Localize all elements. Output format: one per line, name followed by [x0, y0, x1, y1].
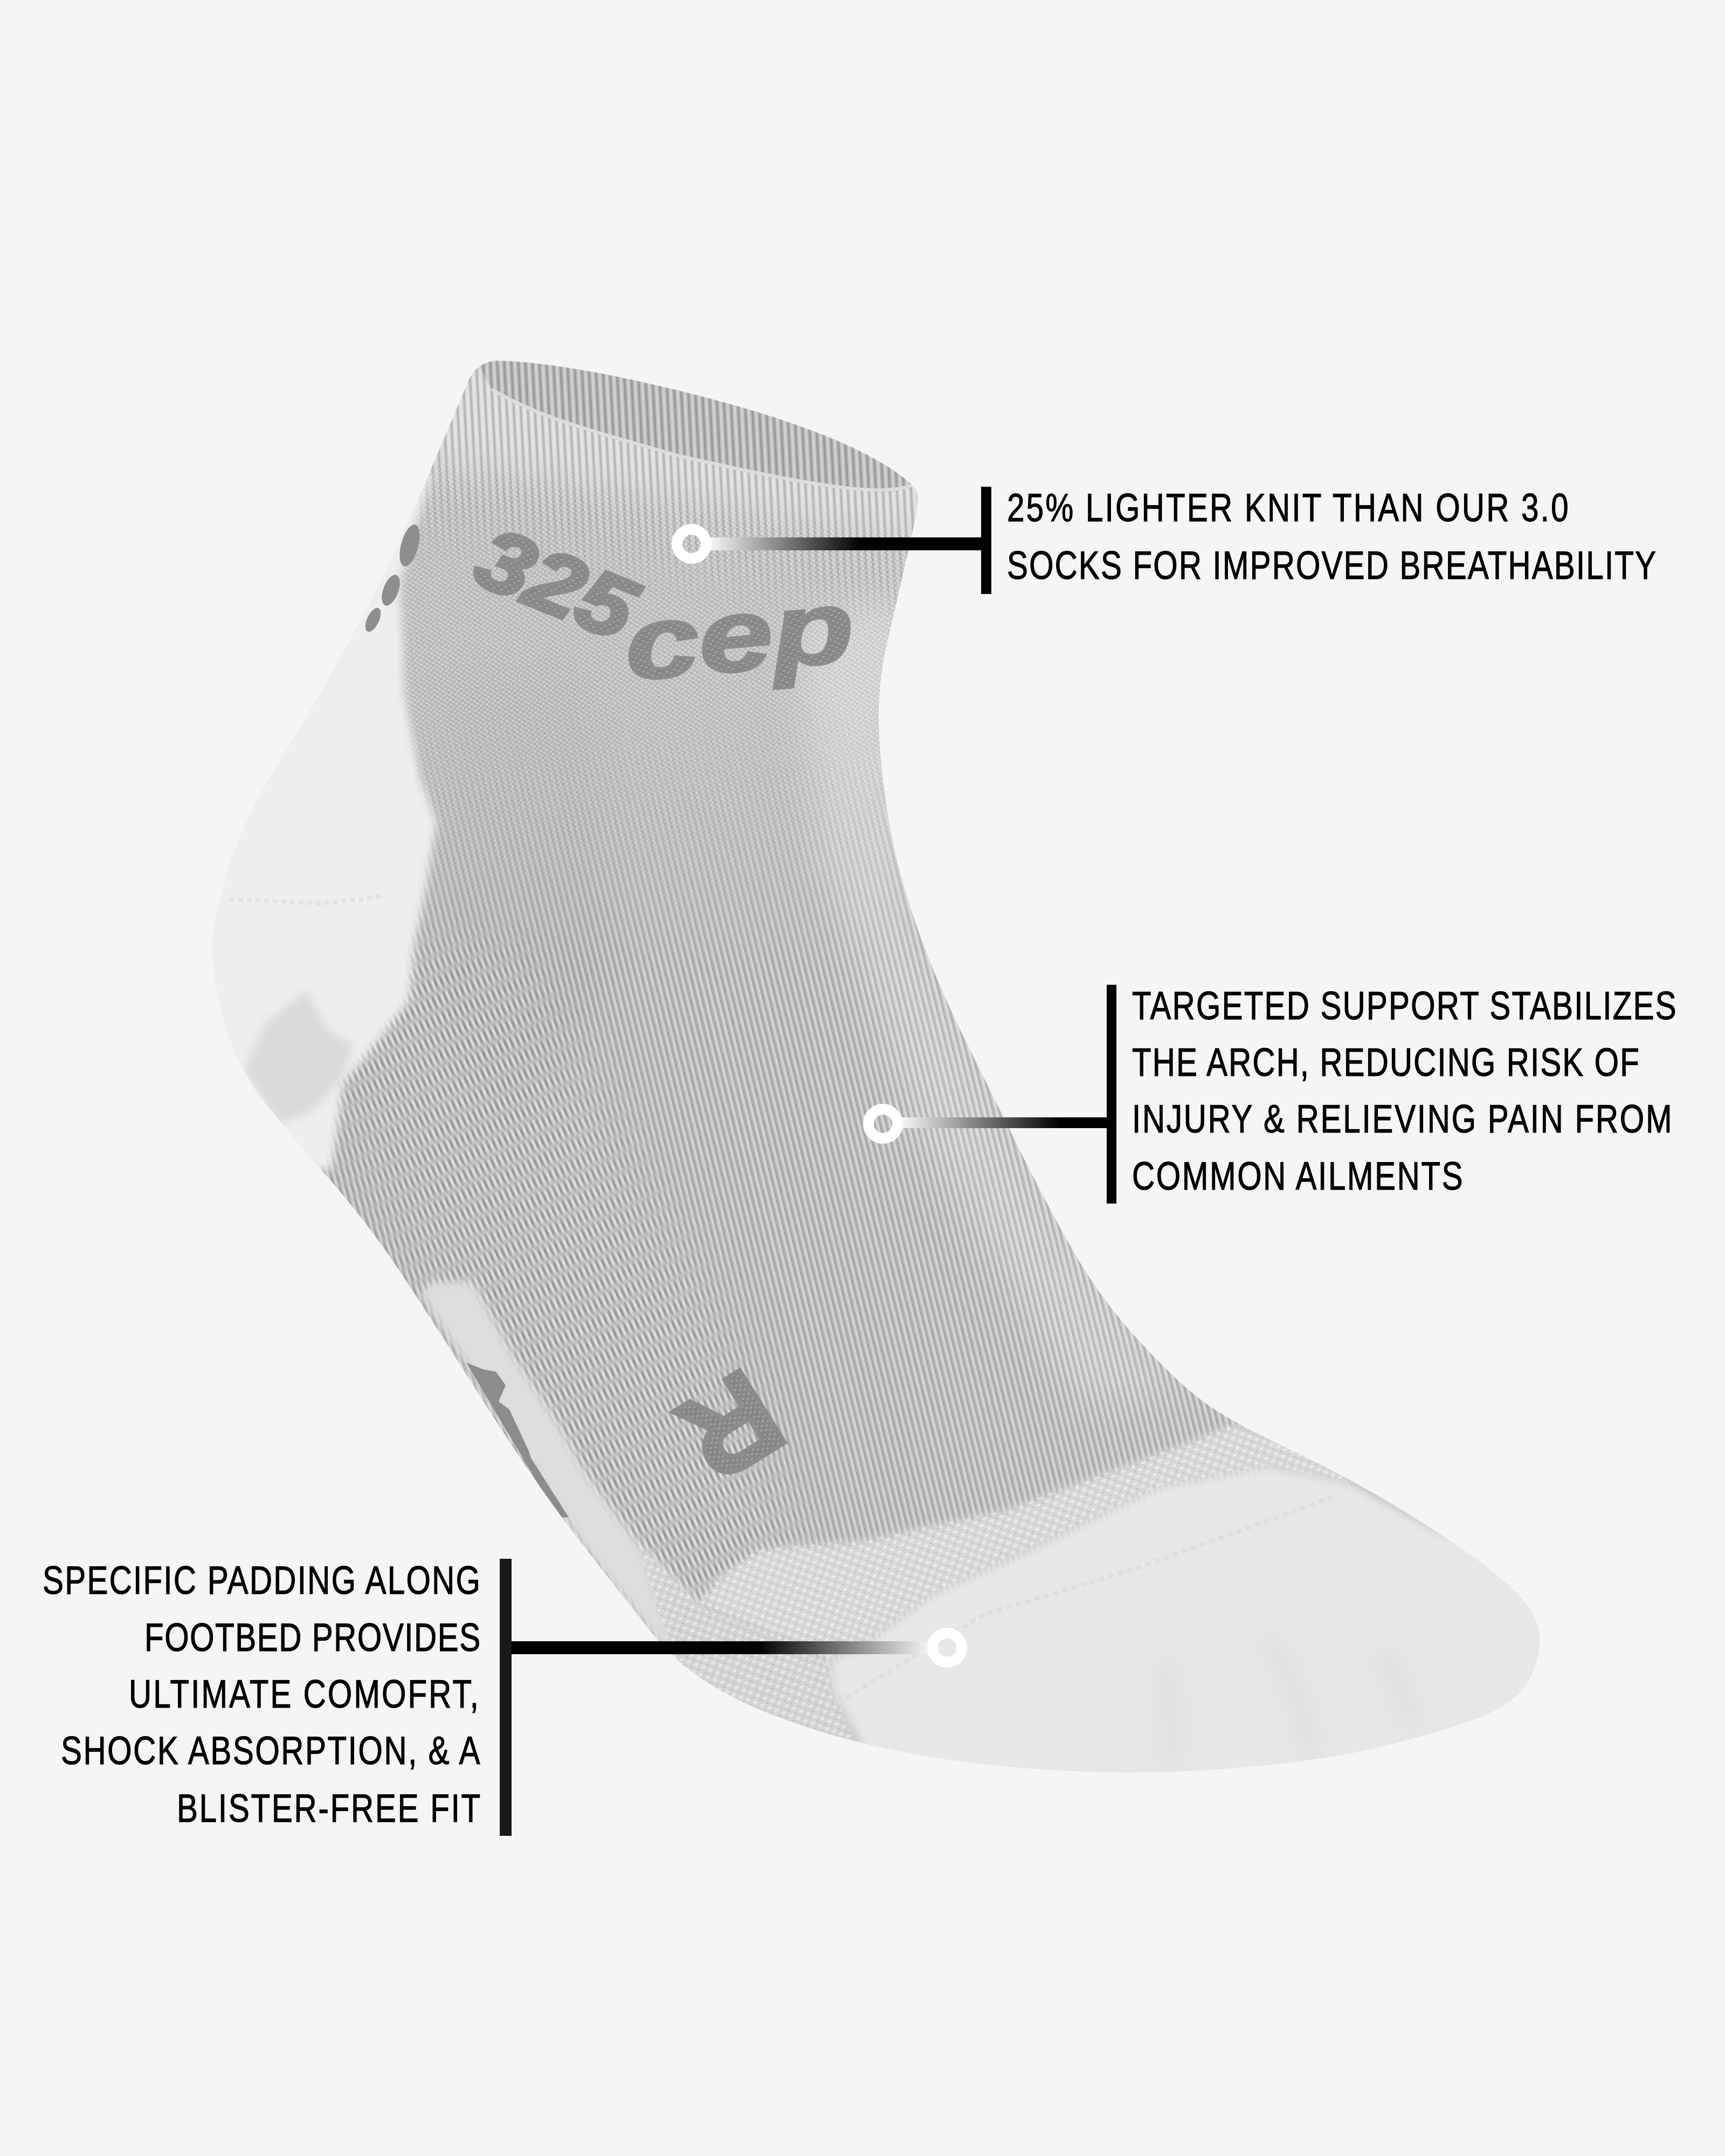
marker ring: [868, 1109, 898, 1138]
leader line: [710, 537, 983, 550]
cuff inner opening: [477, 361, 915, 490]
side logo marks: [362, 522, 424, 634]
marker ring: [677, 529, 706, 558]
callout text: 25% LIGHTER KNIT THAN OUR 3.0: [1007, 486, 1569, 530]
lower ribbing: [320, 786, 1249, 1641]
footbed marks: [466, 1363, 569, 1517]
cuff band: [422, 361, 917, 605]
front logo: cep: [620, 569, 858, 702]
leader line: [509, 1641, 930, 1654]
R size mark: R: [657, 1343, 806, 1508]
marker ring: [933, 1633, 962, 1662]
forefoot mesh band: [698, 1424, 1348, 1661]
toe cap: [830, 1466, 1563, 1789]
callout text: COMMON AILMENTS: [1132, 1155, 1463, 1199]
sock body base: [189, 345, 1563, 1800]
callout text: FOOTBED PROVIDES: [144, 1616, 480, 1660]
leader line: [901, 1117, 1109, 1128]
callout text: BLISTER-FREE FIT: [177, 1787, 480, 1831]
footbed padding strip: [420, 1282, 698, 1663]
callout text: SHOCK ABSORPTION, & A: [61, 1729, 480, 1773]
callout text: [43, 1559, 480, 1831]
callout text: [1007, 486, 1656, 588]
vertical bar: [981, 487, 991, 594]
callout text: SPECIFIC PADDING ALONG: [43, 1559, 480, 1603]
callout text: THE ARCH, REDUCING RISK OF: [1132, 1041, 1639, 1085]
callout: padding along footbed: [43, 1559, 962, 1836]
toe folds: [1164, 1639, 1412, 1768]
outer forefoot knit patch: [638, 1543, 862, 1757]
vertical bar: [500, 1559, 512, 1836]
heel grey insert: [244, 990, 354, 1124]
front logo: 325: [463, 509, 651, 659]
front logo: [463, 509, 858, 702]
sock product illustration: [162, 345, 1563, 1800]
callout text: TARGETED SUPPORT STABILIZES: [1132, 984, 1676, 1028]
callout text: SOCKS FOR IMPROVED BREATHABILITY: [1007, 544, 1656, 588]
callout text: ULTIMATE COMOFRT,: [129, 1673, 479, 1717]
lower left ribbing: [340, 932, 802, 1602]
heel panel: [162, 474, 436, 1170]
callout text: INJURY & RELIEVING PAIN FROM: [1132, 1097, 1672, 1142]
callout text: [1132, 984, 1676, 1199]
body soft shading: [800, 600, 1161, 1400]
heel stitch line: [230, 896, 381, 903]
callout: targeted support: [868, 984, 1676, 1204]
callout: lighter knit: [677, 486, 1656, 594]
upper knit texture: [398, 458, 912, 893]
vertical bar: [1107, 985, 1116, 1204]
toe seam: [838, 1496, 1335, 1703]
